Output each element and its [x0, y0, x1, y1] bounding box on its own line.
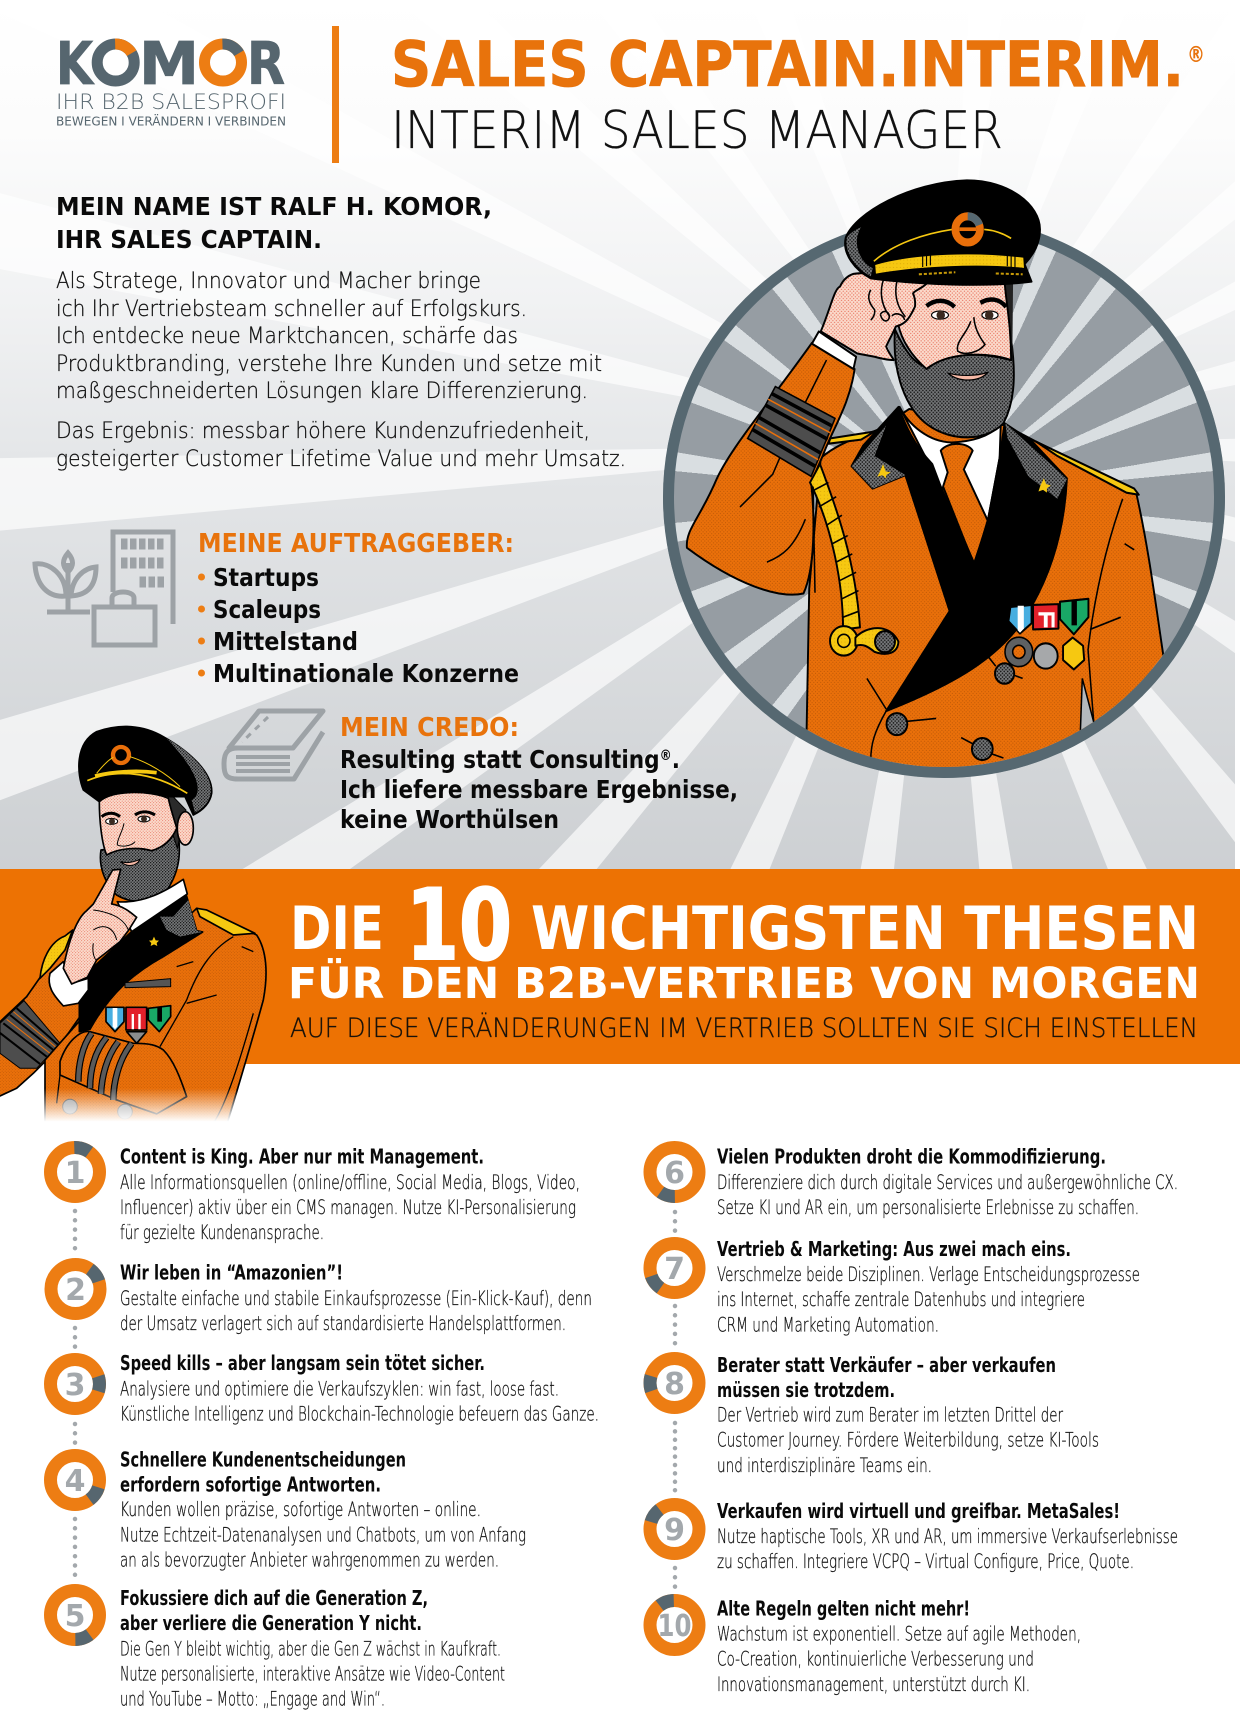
badge 4	[50, 1456, 100, 1504]
background sunburst rays	[0, 270, 1235, 869]
gold rope	[40, 930, 73, 978]
thesis 2: Wir leben in “Amazonien”!	[120, 1260, 343, 1284]
badge 1	[50, 1148, 100, 1196]
sleeve	[687, 343, 855, 595]
connector dots 4-5	[73, 1519, 77, 1577]
thesis 5: Nutze personalisierte, interaktive Ansätze wie Video-Content	[120, 1662, 505, 1686]
intro body text: Ich entdecke neue Marktchancen, schärfe das	[56, 324, 518, 349]
intro body text: maßgeschneiderten Lösungen klare Differenzierung.	[56, 379, 588, 404]
hair	[168, 792, 186, 848]
shirt collar	[117, 879, 187, 932]
circle ring	[668, 222, 1220, 772]
hair	[1006, 284, 1014, 358]
clients heading: MEINE AUFTRAGGEBER:	[198, 529, 514, 559]
officer cap	[845, 180, 1040, 285]
forearm stripes	[78, 1033, 132, 1100]
epaulets	[1036, 442, 1139, 495]
thesis 6	[650, 1144, 1178, 1219]
badge 4: 4	[65, 1464, 85, 1499]
logo: KOMOR: BEWEGEN I VERÄNDERN I VERBINDEN	[56, 114, 286, 128]
badge 10	[650, 1600, 699, 1650]
rear sleeve stripes	[0, 1001, 60, 1068]
facial features	[927, 299, 1006, 380]
credo: ®	[660, 748, 672, 764]
gap between body and arm	[1080, 678, 1095, 731]
medals	[106, 1006, 171, 1043]
sleeve seam	[740, 360, 827, 507]
intro heading: MEIN NAME IST RALF H. KOMOR,	[56, 192, 492, 221]
banner headline: FÜR DEN B2B-VERTRIEB VON MORGEN	[288, 958, 1200, 1009]
thesis 7: CRM und Marketing Automation.	[717, 1314, 939, 1336]
black lapel	[79, 892, 203, 1032]
thesis 5	[50, 1586, 505, 1710]
illustration: saluting captain	[687, 180, 1178, 797]
badge 10: 10	[658, 1609, 692, 1644]
credo: Resulting statt Consulting	[340, 745, 709, 774]
connector dots 7-8	[673, 1306, 677, 1346]
hand finger lines	[869, 273, 905, 321]
badge 9	[650, 1504, 699, 1554]
thesis 3: Speed kills – aber langsam sein tötet sicher.	[120, 1351, 485, 1375]
front forearm	[60, 1031, 187, 1114]
rope knot and button	[830, 626, 898, 656]
connector dots 6-7	[673, 1212, 677, 1231]
black lapel	[852, 407, 1067, 711]
thesis 4	[50, 1448, 526, 1572]
client list: Mittelstand	[213, 627, 358, 656]
client list: Multinationale Konzerne	[213, 659, 519, 688]
badge 5: 5	[65, 1599, 85, 1634]
thesis 4: Kunden wollen präzise, sofortige Antworten – online.	[120, 1498, 481, 1521]
shirt	[900, 407, 1001, 519]
ear	[177, 812, 193, 845]
title: ®	[1187, 43, 1205, 68]
thesis 4: erfordern sofortige Antworten.	[120, 1472, 381, 1496]
logo: KOMOR: M	[139, 29, 199, 98]
credo: Ich liefere messbare Ergebnisse,	[340, 775, 738, 804]
badge 8: 8	[664, 1367, 685, 1402]
thesis 3	[50, 1351, 599, 1426]
collar patch	[160, 900, 202, 937]
sleeve stripes	[748, 387, 835, 476]
badge 7: 7	[664, 1252, 685, 1287]
thesis 5: aber verliere die Generation Y nicht.	[120, 1611, 422, 1635]
thesis 4: an als bevorzugter Anbieter wahrgenommen zu werden.	[120, 1548, 499, 1572]
intro body text: Als Stratege, Innovator und Macher bringe	[56, 269, 481, 294]
thesis 8: müssen sie trotzdem.	[717, 1378, 895, 1402]
thesis 8: Der Vertrieb wird zum Berater im letzten Drittel der	[717, 1404, 1063, 1426]
intro heading: IHR SALES CAPTAIN.	[56, 225, 322, 254]
badge 9: 9	[664, 1513, 685, 1548]
thesis 9	[650, 1499, 1178, 1573]
logo: KOMOR: O	[200, 29, 245, 98]
badge 2	[51, 1264, 100, 1314]
jacket buttons	[63, 1099, 132, 1119]
thesis 7: ins Internet, schaffe zentrale Datenhubs und integriere	[717, 1288, 1085, 1311]
collar stars	[877, 464, 1051, 493]
client list: Scaleups	[213, 595, 321, 624]
badge 3	[50, 1360, 100, 1408]
medals	[1008, 599, 1088, 669]
banner headline: DIE	[290, 894, 384, 964]
thinking hand	[63, 869, 137, 984]
logo: KOMOR: O	[93, 29, 138, 98]
orange banner	[0, 869, 1240, 1064]
officer cap	[79, 726, 212, 815]
badge 6: 6	[664, 1156, 685, 1191]
thesis 7: Vertrieb & Marketing: Aus zwei mach eins.	[717, 1237, 1071, 1261]
beard	[895, 329, 1014, 437]
illustration: thinking captain	[0, 726, 266, 1130]
connector dots 9-10	[673, 1568, 677, 1587]
saluting hand	[821, 272, 928, 360]
logo: KOMOR	[56, 29, 286, 128]
badge 1: 1	[65, 1156, 85, 1191]
credo: .	[672, 745, 680, 774]
face	[99, 792, 177, 855]
client list	[198, 563, 519, 688]
banner headline: 10	[406, 869, 512, 983]
jacket buttons	[887, 654, 1023, 760]
jacket body	[806, 408, 1164, 767]
badge 7	[650, 1244, 699, 1292]
face	[898, 280, 1011, 369]
credo	[340, 713, 738, 834]
header divider	[332, 26, 339, 163]
thesis 5: Die Gen Y bleibt wichtig, aber die Gen Z wächst in Kaufkraft.	[120, 1638, 501, 1660]
badge 2: 2	[65, 1273, 86, 1308]
beard	[100, 825, 179, 901]
thesis 10: Innovationsmanagement, unterstützt durch KI.	[717, 1673, 1030, 1696]
thesis 8: Berater statt Verkäufer – aber verkaufen	[717, 1353, 1056, 1377]
thesis 1: für gezielte Kundenansprache.	[120, 1221, 324, 1244]
background gradient	[0, 0, 1235, 869]
connector dots 8-9	[673, 1423, 677, 1491]
thesis 4: Nutze Echtzeit-Datenanalysen und Chatbots, um von Anfang	[120, 1524, 526, 1546]
intro heading	[56, 192, 492, 254]
logo: KOMOR: R	[247, 29, 285, 98]
thesis 6: Vielen Produkten droht die Kommodifizierung.	[717, 1144, 1106, 1168]
circle backdrop: rays behind captain	[663, 216, 1225, 778]
thesis 1	[50, 1144, 580, 1244]
cuff	[812, 331, 856, 369]
banner headline	[288, 869, 1200, 1009]
credo: MEIN CREDO:	[340, 713, 519, 743]
collar star	[149, 937, 159, 946]
intro body text: Produktbranding, verstehe Ihre Kunden und setze mit	[56, 352, 602, 377]
title: INTERIM SALES MANAGER	[391, 101, 1003, 161]
thesis 5: Fokussiere dich auf die Generation Z,	[120, 1586, 428, 1610]
badge 5	[50, 1590, 100, 1640]
credo: keine Worthülsen	[340, 805, 559, 834]
thesis 8: und interdisziplinäre Teams ein.	[717, 1454, 932, 1477]
facial features	[102, 812, 155, 865]
thesis 10: Alte Regeln gelten nicht mehr!	[717, 1596, 970, 1620]
thesis 7	[650, 1237, 1140, 1336]
shirt cuff	[49, 962, 88, 1006]
thesis 3: Analysiere und optimiere die Verkaufszyklen: win fast, loose fast.	[120, 1378, 559, 1400]
intro body text: Das Ergebnis: messbar höhere Kundenzufriedenheit,	[56, 419, 590, 444]
icon: book	[224, 711, 323, 779]
aiguillette rope	[810, 464, 860, 629]
torso	[45, 908, 266, 1125]
icon: startup plant, office building and briefcase	[35, 532, 173, 645]
thesis 8	[650, 1353, 1099, 1477]
thesis 10	[650, 1596, 1081, 1696]
thesis 3: Künstliche Intelligenz und Blockchain-Technologie befeuern das Ganze.	[120, 1402, 599, 1426]
jacket fold lines	[767, 487, 1134, 760]
logo: KOMOR: IHR B2B SALESPROFI	[56, 90, 286, 114]
fade out at bottom	[37, 1088, 237, 1130]
thesis 10: Wachstum ist exponentiell. Setze auf agile Methoden,	[717, 1622, 1081, 1646]
thesis 4: Schnellere Kundenentscheidungen	[120, 1448, 406, 1472]
connector dots 1-2	[73, 1211, 77, 1253]
thesis 2: der Umsatz verlagert sich auf standardisierte Handelsplattformen.	[120, 1312, 566, 1335]
badge 3: 3	[65, 1368, 85, 1403]
badge 8	[650, 1358, 699, 1408]
thesis 5: und YouTube – Motto: „Engage and Win“.	[120, 1688, 385, 1710]
badge 6	[650, 1148, 699, 1196]
connector dots 2-3	[73, 1328, 77, 1347]
thesis 2	[51, 1260, 592, 1335]
thesis 1: Content is King. Aber nur mit Management.	[120, 1144, 484, 1168]
sleeve fold lines	[57, 937, 253, 1123]
thesis 1: Alle Informationsquellen (online/offline, Social Media, Blogs, Video,	[120, 1171, 580, 1194]
client list: Startups	[213, 563, 319, 592]
tie	[941, 444, 988, 564]
collar patches	[852, 425, 905, 489]
logo: KOMOR: K	[56, 29, 95, 98]
thesis 2: Gestalte einfache und stabile Einkaufsprozesse (Ein-Klick-Kauf), denn	[120, 1287, 592, 1310]
intro body text: ich Ihr Vertriebsteam schneller auf Erfolgskurs.	[56, 297, 527, 322]
connector dots 3-4	[73, 1424, 77, 1443]
epaulet	[197, 908, 255, 935]
title	[391, 28, 1205, 161]
rear arm sleeve	[0, 933, 82, 1096]
thesis 1: Influencer) aktiv über ein CMS managen. Nutze KI-Personalisierung	[120, 1196, 576, 1219]
breast pocket	[125, 979, 171, 988]
thesis 10: Co-Creation, kontinuierliche Verbesserung und	[717, 1648, 1034, 1670]
intro body text: gesteigerter Customer Lifetime Value und mehr Umsatz.	[56, 447, 626, 472]
intro body text	[56, 269, 626, 472]
